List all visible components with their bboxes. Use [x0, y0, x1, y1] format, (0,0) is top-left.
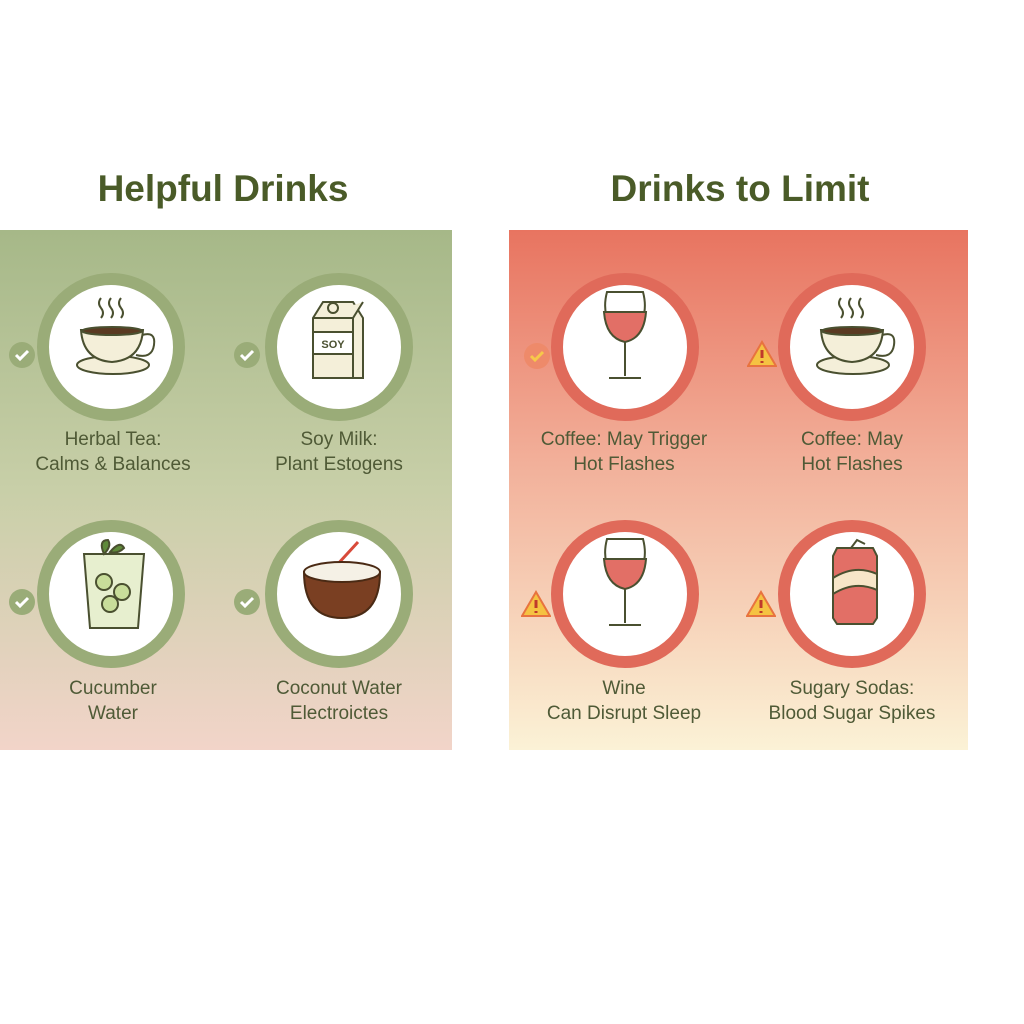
label	[275, 429, 403, 475]
badge: warning	[746, 590, 776, 617]
icon: tea cup	[76, 297, 156, 375]
title: helpful drinks: Helpful Drinks	[98, 168, 348, 209]
item: wine	[521, 520, 701, 724]
badge: check	[9, 589, 35, 615]
label: Herbal Tea:	[65, 429, 161, 450]
item: coffee (wine icon)	[524, 273, 707, 475]
title: drinks to limit: Drinks to Limit	[610, 168, 870, 209]
label	[276, 678, 402, 724]
item: cucumber water	[9, 520, 185, 724]
label: Water	[88, 703, 138, 724]
icon: glass	[82, 539, 146, 629]
label: Can Disrupt Sleep	[547, 703, 701, 724]
item: coconut water	[234, 520, 413, 724]
label: Soy Milk:	[300, 429, 378, 450]
label: Hot Flashes	[573, 454, 675, 475]
label	[35, 429, 191, 475]
label	[801, 429, 903, 475]
label: Cucumber	[69, 678, 157, 699]
label	[547, 678, 701, 724]
item: soy milk	[234, 273, 413, 475]
label: Calms & Balances	[35, 454, 191, 475]
label: Coffee: May Trigger	[541, 429, 707, 450]
label: Coconut Water	[276, 678, 402, 699]
label: Blood Sugar Spikes	[769, 703, 935, 724]
label	[69, 678, 157, 724]
icon: soda can	[832, 538, 878, 625]
label: Electroictes	[290, 703, 388, 724]
label: Coffee: May	[801, 429, 903, 450]
label: Hot Flashes	[801, 454, 903, 475]
item: sugary sodas	[746, 520, 935, 724]
icon: soy carton	[312, 301, 364, 379]
icon: coffee cup	[816, 297, 896, 375]
label: Sugary Sodas:	[790, 678, 914, 699]
icon: wine glass	[602, 538, 648, 626]
badge: check	[524, 343, 550, 369]
label: Wine	[602, 678, 646, 699]
panel: drinks to limit	[509, 230, 968, 750]
badge: check	[234, 342, 260, 368]
icon: coconut	[303, 541, 381, 619]
label: Plant Estogens	[275, 454, 403, 475]
icon: wine glass	[602, 291, 648, 379]
item: herbal tea	[9, 273, 191, 475]
item: coffee	[747, 273, 926, 475]
icon: soy carton: SOY	[321, 339, 345, 351]
badge: check	[234, 589, 260, 615]
badge: warning	[747, 340, 777, 367]
badge: check	[9, 342, 35, 368]
label	[769, 678, 935, 724]
panel: helpful drinks	[0, 230, 452, 750]
badge: warning	[521, 590, 551, 617]
label	[541, 429, 707, 475]
